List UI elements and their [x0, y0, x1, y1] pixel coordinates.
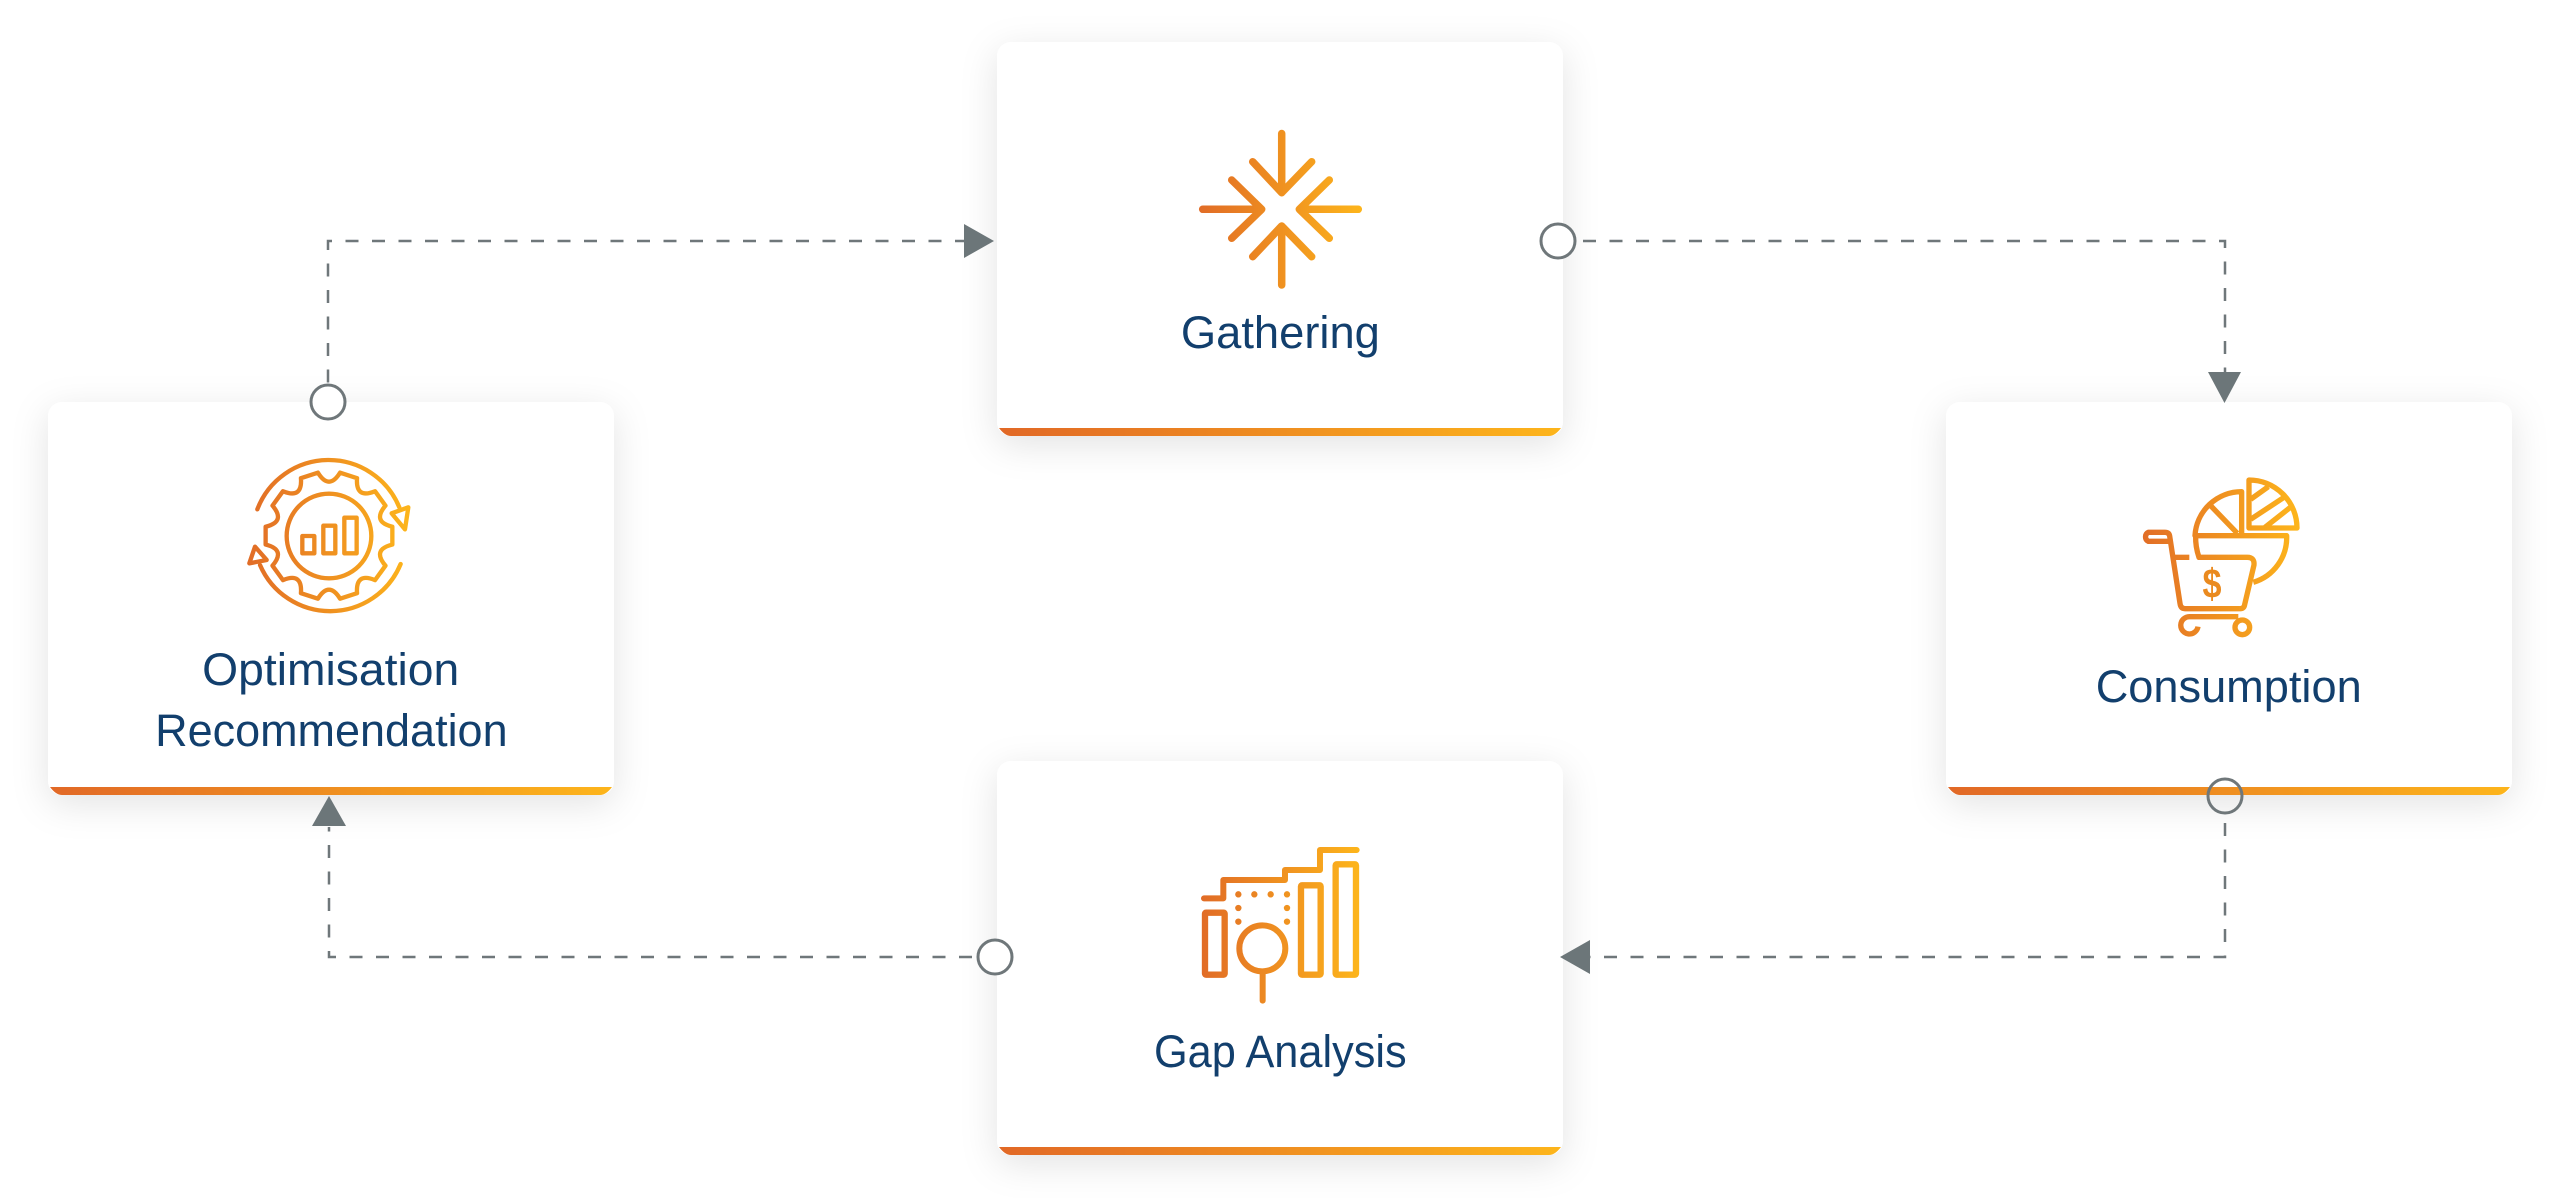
accent bar: optimisation recommendation — [50, 787, 612, 795]
heading: optimisation recommendation: Recommendation — [155, 705, 508, 756]
heading: gap analysis: Gap Analysis — [1154, 1026, 1407, 1077]
panel: gap analysis — [997, 761, 1563, 1155]
arrow: consumption to gap analysis — [1560, 779, 2242, 974]
icon: converging arrows — [1203, 134, 1358, 285]
accent bar: consumption — [1948, 787, 2510, 795]
heading: consumption: Consumption — [2096, 661, 2362, 712]
panel: consumption — [1946, 402, 2512, 795]
arrow: optimisation to gathering — [311, 224, 994, 419]
accent bar: gap analysis — [999, 1147, 1561, 1155]
icon: bar chart with magnifier — [1204, 850, 1357, 1001]
heading: gathering: Gathering — [1181, 307, 1380, 358]
icon: gear with bar chart and cycle arrows — [249, 460, 408, 611]
accent bar: gathering — [999, 428, 1561, 436]
arrow: gap analysis to optimisation — [312, 796, 1012, 974]
panel: optimisation recommendation — [48, 402, 614, 795]
icon: dollar sign: $ — [2202, 560, 2221, 607]
arrow: gathering to consumption — [1541, 224, 2241, 403]
heading: optimisation recommendation — [155, 644, 508, 756]
heading: optimisation recommendation: Optimisation — [202, 644, 459, 695]
panel: gathering — [997, 42, 1563, 436]
icon: shopping cart with pie chart — [2146, 480, 2297, 635]
